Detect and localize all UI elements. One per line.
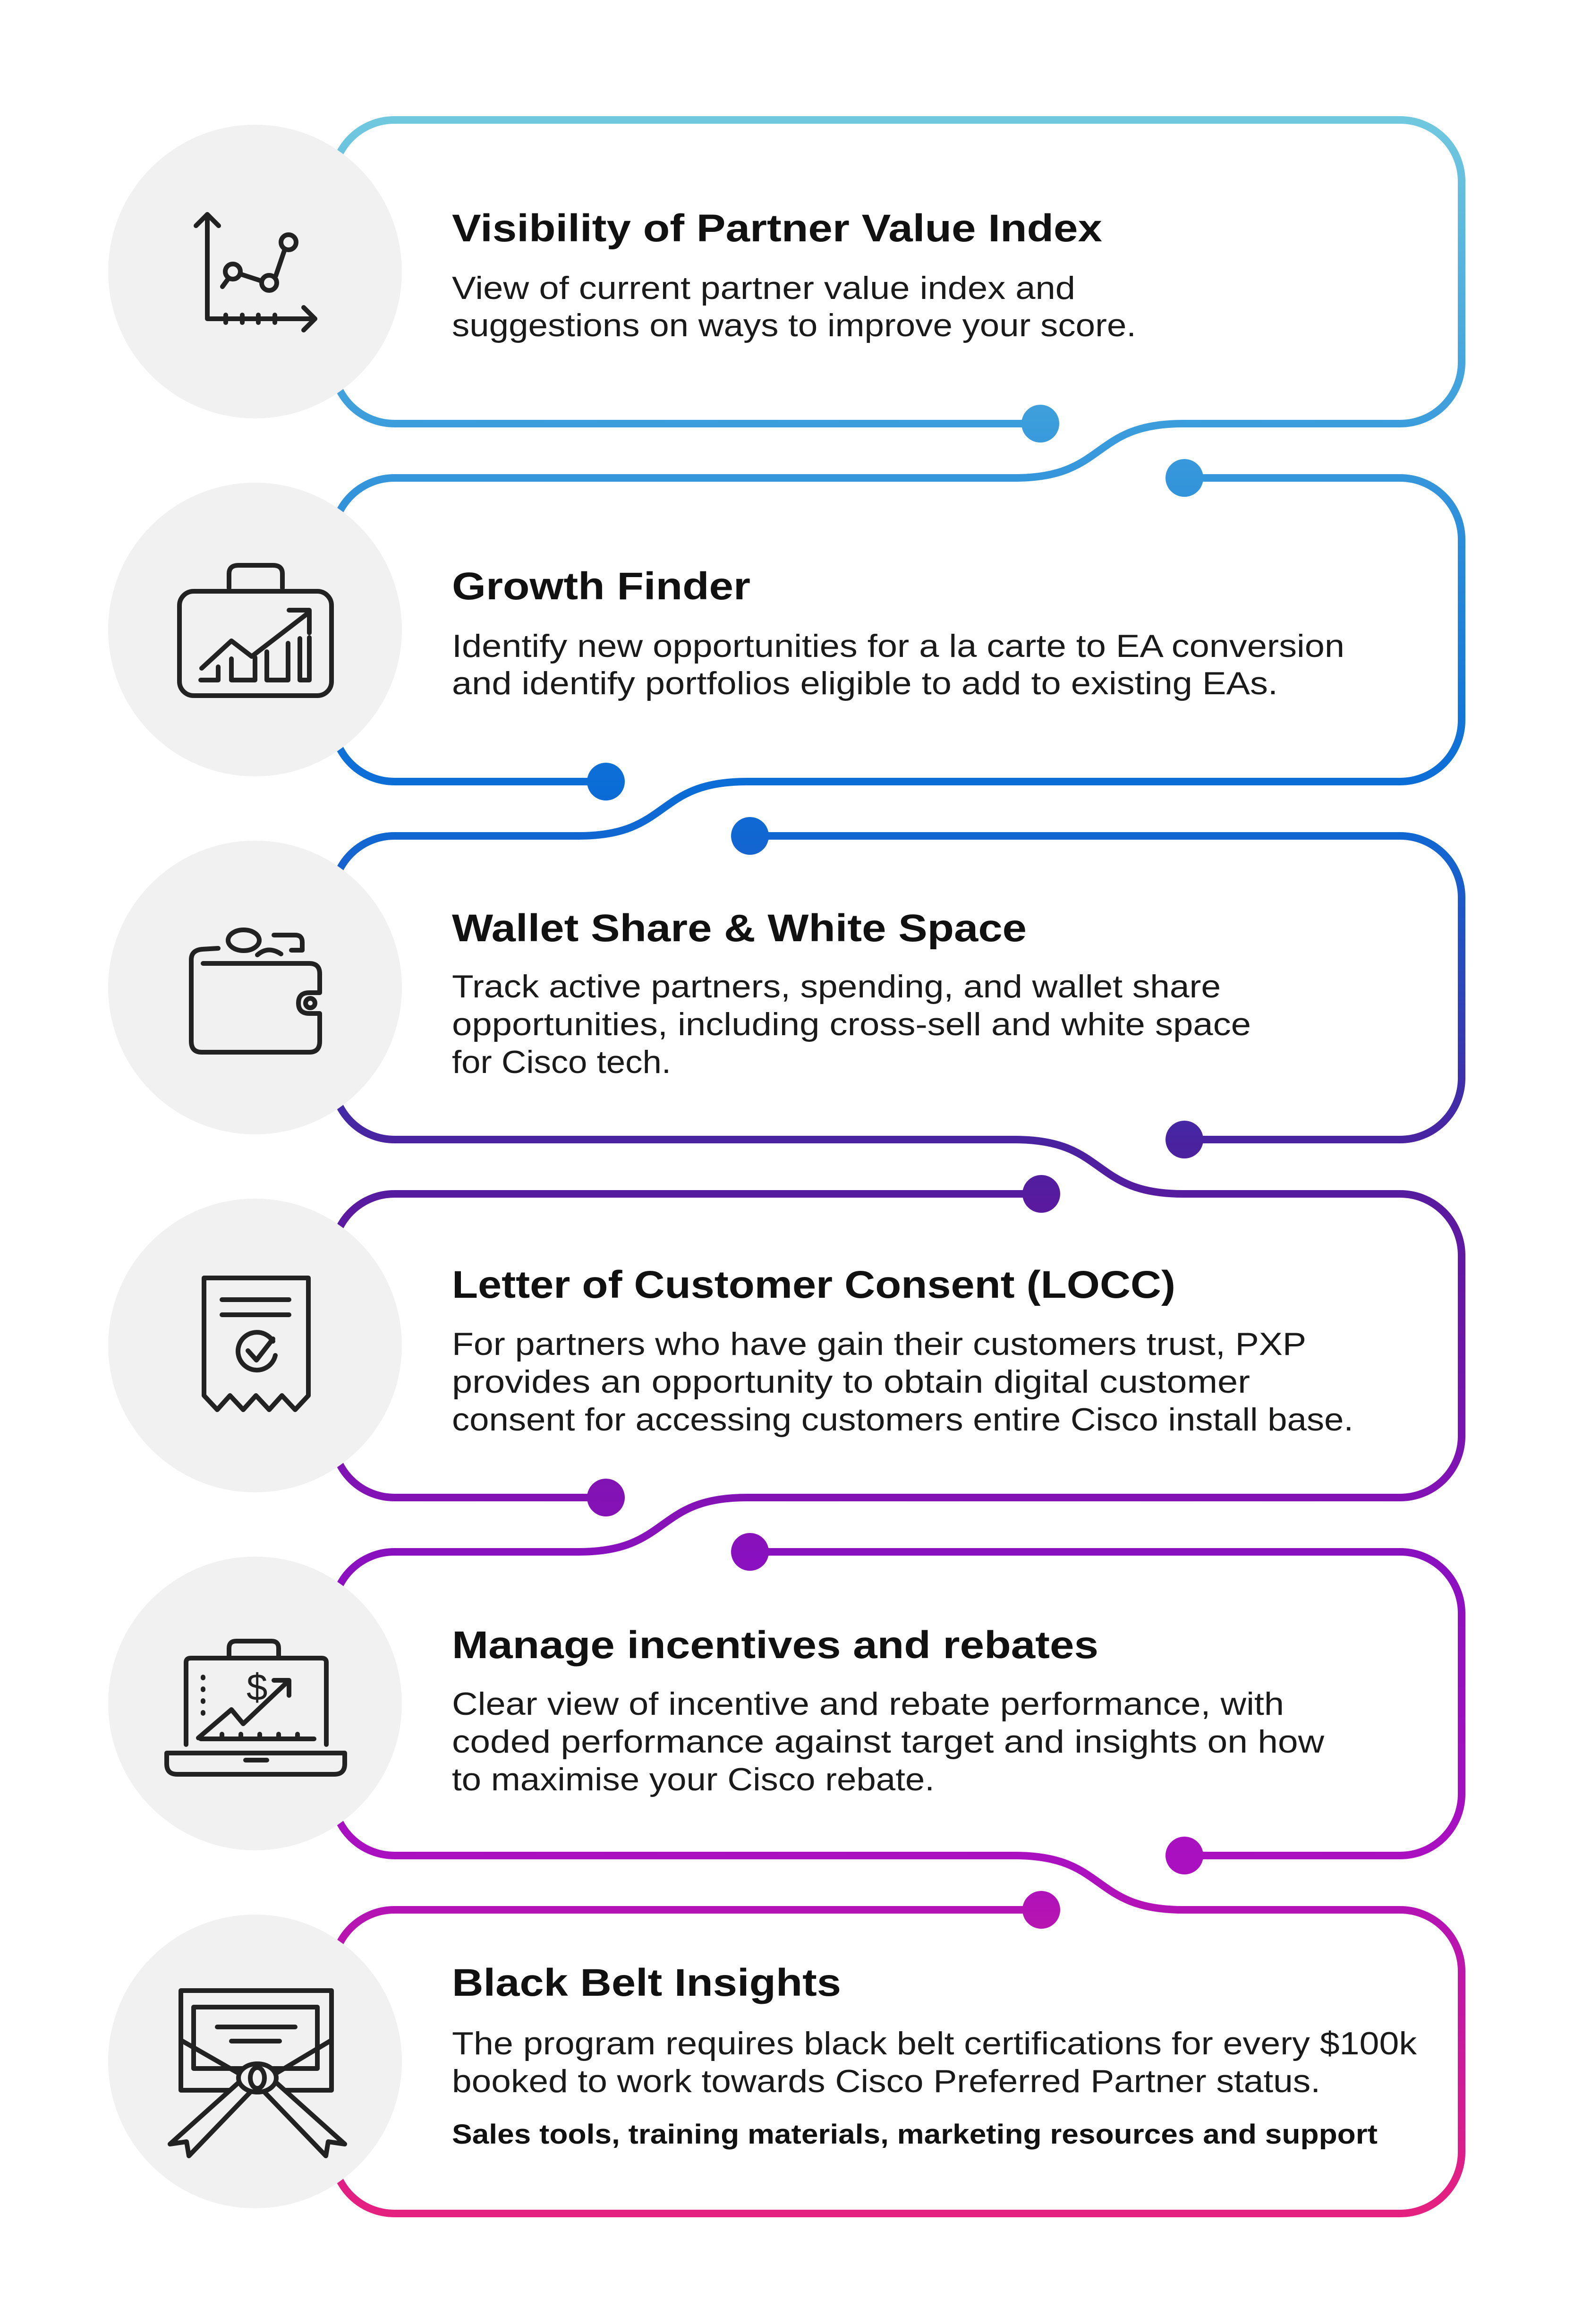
panel 6 text <box>452 1961 1417 2150</box>
icon: black belt certificate <box>170 1991 345 2156</box>
icon: wallet <box>191 930 320 1052</box>
panel 6 text: booked to work towards Cisco Preferred Partner status. <box>452 2063 1320 2099</box>
panel 3 text <box>452 907 1251 1080</box>
panel 2 text: Identify new opportunities for a la carte to EA conversion <box>452 628 1344 664</box>
panel 3 text: for Cisco tech. <box>452 1044 671 1080</box>
panel 3 text: Wallet Share & White Space <box>452 907 1027 950</box>
panel 5 text: to maximise your Cisco rebate. <box>452 1762 935 1797</box>
panel 4 text: consent for accessing customers entire Cisco install base. <box>452 1402 1353 1438</box>
panel 1 text: suggestions on ways to improve your score. <box>452 307 1136 343</box>
panel 4 text: provides an opportunity to obtain digital customer <box>452 1364 1250 1400</box>
panel 2 text: and identify portfolios eligible to add to existing EAs. <box>452 665 1278 701</box>
icon: laptop incentives: $ <box>247 1666 267 1708</box>
connector dots <box>587 405 1203 1929</box>
panel 1 text: Visibility of Partner Value Index <box>452 207 1102 250</box>
icon: chart <box>196 214 315 330</box>
icon: receipt consent <box>204 1278 308 1410</box>
panel 6 text: Black Belt Insights <box>452 1961 841 2004</box>
panel 6 text: Sales tools, training materials, marketing resources and support <box>452 2119 1378 2150</box>
panel 2 text: Growth Finder <box>452 565 750 608</box>
icon: laptop incentives <box>167 1641 345 1774</box>
panel 1 text <box>452 207 1136 343</box>
panel 5 text: Manage incentives and rebates <box>452 1624 1098 1667</box>
connector lines and panel outlines <box>333 120 1462 2213</box>
panel 5 text: Clear view of incentive and rebate performance, with <box>452 1686 1284 1722</box>
icon: briefcase growth <box>179 565 332 696</box>
panel 3 text: opportunities, including cross-sell and white space <box>452 1006 1251 1042</box>
panel 6 text: The program requires black belt certifications for every $100k <box>452 2026 1417 2061</box>
panel 4 text <box>452 1263 1353 1438</box>
panel 3 text: Track active partners, spending, and wallet share <box>452 969 1221 1005</box>
panel 2 text <box>452 565 1344 701</box>
icon circles <box>108 125 402 2208</box>
panel 4 text: Letter of Customer Consent (LOCC) <box>452 1263 1175 1306</box>
panel 4 text: For partners who have gain their customers trust, PXP <box>452 1326 1306 1362</box>
panel 5 text: coded performance against target and insights on how <box>452 1724 1325 1760</box>
panel 5 text <box>452 1624 1325 1797</box>
panel 1 text: View of current partner value index and <box>452 270 1075 306</box>
